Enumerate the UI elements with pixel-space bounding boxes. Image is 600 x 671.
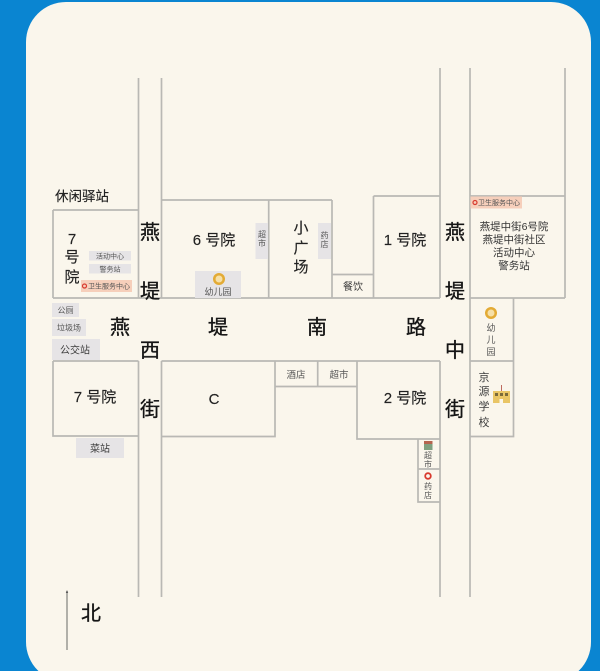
tag: 垃圾场 (52, 319, 86, 336)
block: 7号院 south: 7 号院 (74, 388, 116, 406)
tag: 药店 north: 药 (320, 230, 328, 240)
tag: 卫生服务中心 east: 卫生服务中心 (478, 198, 520, 207)
block: 7号院 north (64, 231, 132, 292)
block: 幼儿园 east: 儿 (486, 335, 496, 345)
block: C: C (209, 391, 220, 408)
block: 京源学校: 校 (478, 415, 490, 429)
tag: 超市 north (256, 223, 268, 259)
block: 小广场: 小 (293, 220, 309, 237)
tag: 公交站: 公交站 (60, 344, 90, 356)
tag: 超市 north: 市 (258, 238, 266, 248)
block: 7号院 north: 号 (64, 249, 80, 266)
street name: 燕堤西街: 燕 (140, 221, 160, 244)
tag: 公厕 (52, 303, 79, 317)
tag: 卫生服务中心 west: 卫生服务中心 (88, 282, 130, 290)
label: 餐饮: 餐饮 (343, 280, 363, 293)
street name: 燕堤中街: 堤 (445, 280, 465, 303)
label: 酒店: 酒店 (286, 369, 306, 381)
block: 京源学校 (478, 370, 510, 429)
north arrow (66, 590, 68, 650)
icon: kindergarten pin east (485, 307, 497, 319)
icon: pharmacy (425, 473, 431, 479)
block: 2号院: 2 号院 (384, 389, 426, 407)
block: 1号院: 1 号院 (384, 231, 426, 249)
shop: 药店 south: 药 (424, 481, 432, 491)
block: 6号院: 6 号院 (193, 231, 235, 249)
label: 超市 middle: 超市 (329, 369, 349, 381)
tag: 公厕: 公厕 (58, 306, 74, 315)
street name: 燕堤中街 (445, 221, 465, 421)
tag: 超市 north: 超 (258, 229, 266, 239)
street name: 燕堤南路: 燕 (110, 316, 130, 339)
block: 京源学校: 学 (478, 399, 490, 413)
street name: 燕堤南路: 堤 (208, 316, 228, 339)
street name: 燕堤西街: 西 (140, 340, 160, 362)
tag: 幼儿园 north (195, 271, 241, 298)
icon: school (493, 385, 510, 403)
block: 幼儿园 east (485, 307, 497, 357)
text: 燕堤中街6号院 community: 警务站 (498, 259, 530, 272)
block: 幼儿园 east: 园 (486, 347, 496, 357)
tag: 菜站 (76, 438, 124, 458)
shop: 药店 south: 店 (424, 490, 432, 500)
street name: 燕堤中街: 街 (445, 398, 465, 421)
tag: 菜站: 菜站 (90, 442, 110, 455)
street name: 燕堤中街: 燕 (445, 221, 465, 244)
text: 燕堤中街6号院 community: 活动中心 (493, 246, 535, 259)
text: 燕堤中街6号院 community (480, 220, 549, 272)
tag: 药店 north: 店 (320, 239, 328, 249)
tag: 活动中心: 活动中心 (96, 252, 124, 260)
shop: 药店 south (424, 473, 432, 500)
shop: 超市 south: 超 (424, 450, 432, 460)
block: 7号院 north: 7 (68, 231, 76, 248)
street name: 燕堤南路 (110, 316, 426, 339)
tag: 药店 north (318, 223, 331, 259)
text: 燕堤中街6号院 community: 燕堤中街6号院 (480, 220, 549, 233)
heading: 休闲驿站: 休闲驿站 (55, 189, 109, 204)
label: 北: 北 (81, 602, 101, 625)
street name: 燕堤西街 (140, 221, 160, 421)
block: 小广场: 场 (293, 259, 309, 276)
tag: 幼儿园 north: 幼儿园 (204, 286, 232, 297)
tag: 垃圾场: 垃圾场 (57, 322, 81, 332)
block: 京源学校: 源 (478, 384, 490, 398)
street name: 燕堤西街: 街 (140, 398, 160, 421)
tag: 卫生服务中心 east (470, 196, 522, 208)
shop: 超市 south: 市 (424, 459, 432, 469)
street name: 燕堤南路: 南 (307, 316, 327, 339)
street name: 燕堤南路: 路 (406, 316, 426, 339)
icon: supermarket (424, 441, 432, 450)
block: 小广场: 广 (293, 240, 309, 257)
tag: 公交站 (52, 339, 100, 360)
shop: 超市 south (424, 441, 432, 469)
tag: 警务站: 警务站 (100, 264, 120, 274)
text: 燕堤中街6号院 community: 燕堤中街社区 (482, 233, 546, 246)
street name: 燕堤西街: 堤 (140, 280, 160, 303)
block: 7号院 north: 院 (64, 268, 80, 286)
map: roads and blocks (53, 68, 565, 597)
block: 京源学校: 京 (478, 370, 490, 384)
street name: 燕堤中街: 中 (445, 339, 465, 362)
block: 小广场 (293, 220, 309, 276)
icon: kindergarten pin (213, 273, 225, 285)
block: 幼儿园 east: 幼 (486, 322, 496, 333)
